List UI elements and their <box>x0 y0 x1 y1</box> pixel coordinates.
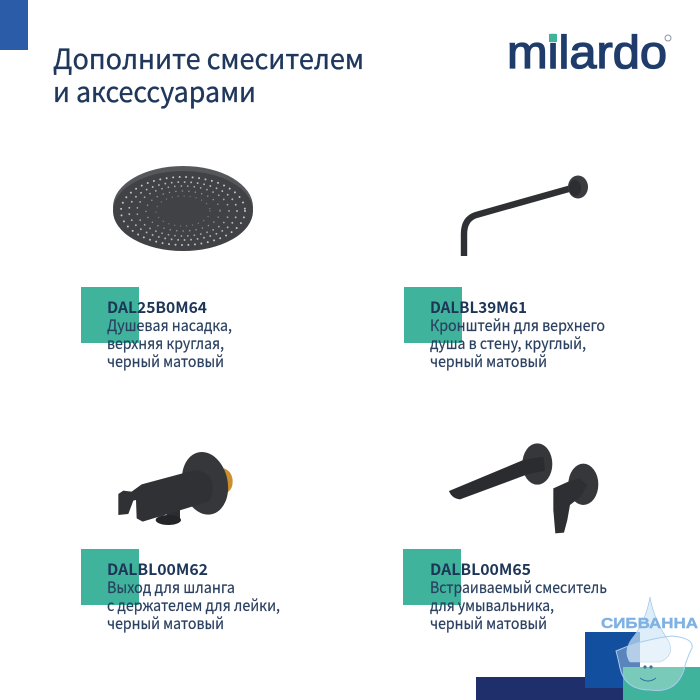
corner accent: top-left blue block <box>0 0 28 50</box>
product text: Встраиваемый смеситель <box>430 576 607 598</box>
product text: черный матовый <box>430 612 547 634</box>
teal square <box>404 287 462 343</box>
product text: Душевая насадка, <box>107 314 232 336</box>
panel: built-in mixer <box>403 443 607 634</box>
watermark: СИБВАННА bath logo <box>601 597 698 691</box>
watermark label: СИБВАННА <box>601 615 698 632</box>
product text: с держателем для лейки, <box>107 594 280 616</box>
icon: wall mixer with spout and lever <box>449 443 598 533</box>
title: Дополните смесителем <box>53 38 364 78</box>
product text <box>430 558 607 634</box>
product text: DAL25B0M64 <box>107 296 207 318</box>
title <box>53 38 364 111</box>
product text: DALBL00M65 <box>430 558 531 580</box>
icon: wall shower arm <box>464 176 588 256</box>
product text <box>430 296 605 372</box>
product text: DALBL00M62 <box>107 558 208 580</box>
product text: Выход для шланга <box>107 576 235 598</box>
teal square <box>81 549 139 605</box>
product text: Кронштейн для верхнего <box>430 314 605 336</box>
product text: черный матовый <box>107 350 224 372</box>
product text: DALBL39M61 <box>430 296 527 318</box>
panel: hose outlet <box>81 448 280 634</box>
corner accent: bottom-right color blocks <box>476 632 700 700</box>
product text: для умывальника, <box>430 594 554 616</box>
icon: round shower head <box>113 166 253 251</box>
teal square <box>81 287 139 343</box>
icon: smiling bathtub <box>616 636 692 691</box>
product text: верхняя круглая, <box>107 332 224 354</box>
panel: shower head <box>81 166 253 372</box>
product text: черный матовый <box>107 612 224 634</box>
icon: hose outlet with holder <box>118 448 234 525</box>
panel: shower arm <box>404 176 605 372</box>
product text: черный матовый <box>430 350 547 372</box>
teal square <box>403 549 461 605</box>
product text: душа в стену, круглый, <box>430 332 586 354</box>
logo: milardo: milardo <box>507 26 667 78</box>
title: и аксессуарами <box>53 71 256 111</box>
product text <box>107 296 232 372</box>
product text <box>107 558 280 634</box>
icon: water drop <box>627 597 671 662</box>
